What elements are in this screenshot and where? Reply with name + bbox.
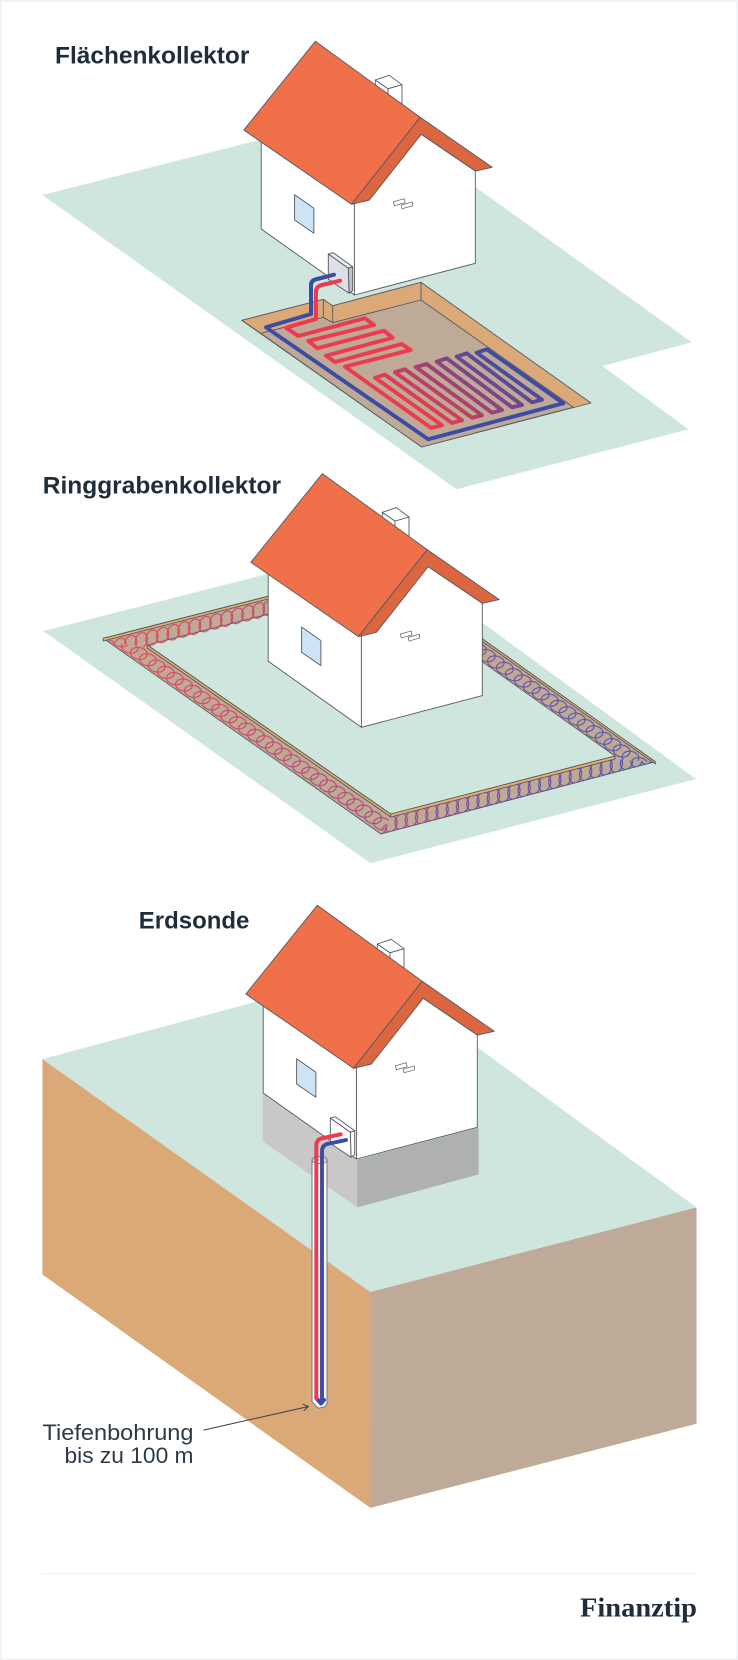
panel: Erdsonde — [42, 905, 696, 1508]
serpentine pipe fading red to blue — [345, 349, 563, 428]
footer divider — [42, 1573, 697, 1574]
house — [251, 474, 499, 727]
wall vent — [393, 199, 413, 209]
pipe connections to heat pump — [311, 275, 340, 305]
heading: Erdsonde: Erdsonde — [139, 908, 249, 934]
chimney — [377, 939, 404, 970]
heat pump box — [330, 1117, 355, 1157]
gable overhang — [352, 117, 492, 204]
window — [295, 195, 314, 233]
ground block: right soil face — [370, 1207, 696, 1508]
ground plot — [42, 112, 692, 489]
window — [302, 627, 321, 666]
chimney — [375, 75, 402, 106]
wall vent — [395, 1063, 415, 1073]
callout: Tiefenbohrung bis zu 100 m: bis zu 100 m — [64, 1443, 194, 1468]
panel: Ringgrabenkollektor — [44, 473, 696, 864]
chimney — [382, 508, 409, 538]
borehole tube — [312, 1156, 327, 1408]
excavated collector field — [242, 282, 591, 447]
house walls — [263, 998, 477, 1159]
arrow: pointer to borehole — [204, 1404, 308, 1430]
ground collector coils — [107, 600, 654, 834]
blue return pipe — [266, 275, 563, 439]
house walls — [268, 567, 482, 727]
wall vent — [400, 631, 420, 641]
heading: Flächenkollektor: Flächenkollektor — [55, 42, 249, 70]
house walls — [261, 134, 475, 295]
logo: Finanztip: Finanztip — [580, 1593, 697, 1623]
roof — [244, 41, 420, 204]
roof — [251, 474, 427, 637]
ground plot — [43, 546, 696, 863]
foundation — [263, 1093, 479, 1207]
red supply pipe with collector loops — [286, 281, 411, 367]
ground block: left soil face — [42, 1059, 370, 1508]
roof — [246, 905, 422, 1068]
panel: Flächenkollektor — [42, 41, 692, 489]
callout: Tiefenbohrung bis zu 100 m — [42, 1420, 194, 1468]
house — [246, 905, 494, 1159]
ground block: grass top — [42, 971, 696, 1292]
window — [297, 1059, 316, 1097]
probe pipes — [316, 1134, 346, 1404]
house — [244, 41, 492, 295]
heat pump box — [328, 253, 353, 293]
gable overhang — [354, 981, 494, 1068]
ring trench — [103, 567, 655, 834]
callout: Tiefenbohrung bis zu 100 m: Tiefenbohrung — [42, 1420, 194, 1445]
gable overhang — [358, 550, 499, 637]
heading: Ringgrabenkollektor: Ringgrabenkollektor — [43, 472, 281, 500]
